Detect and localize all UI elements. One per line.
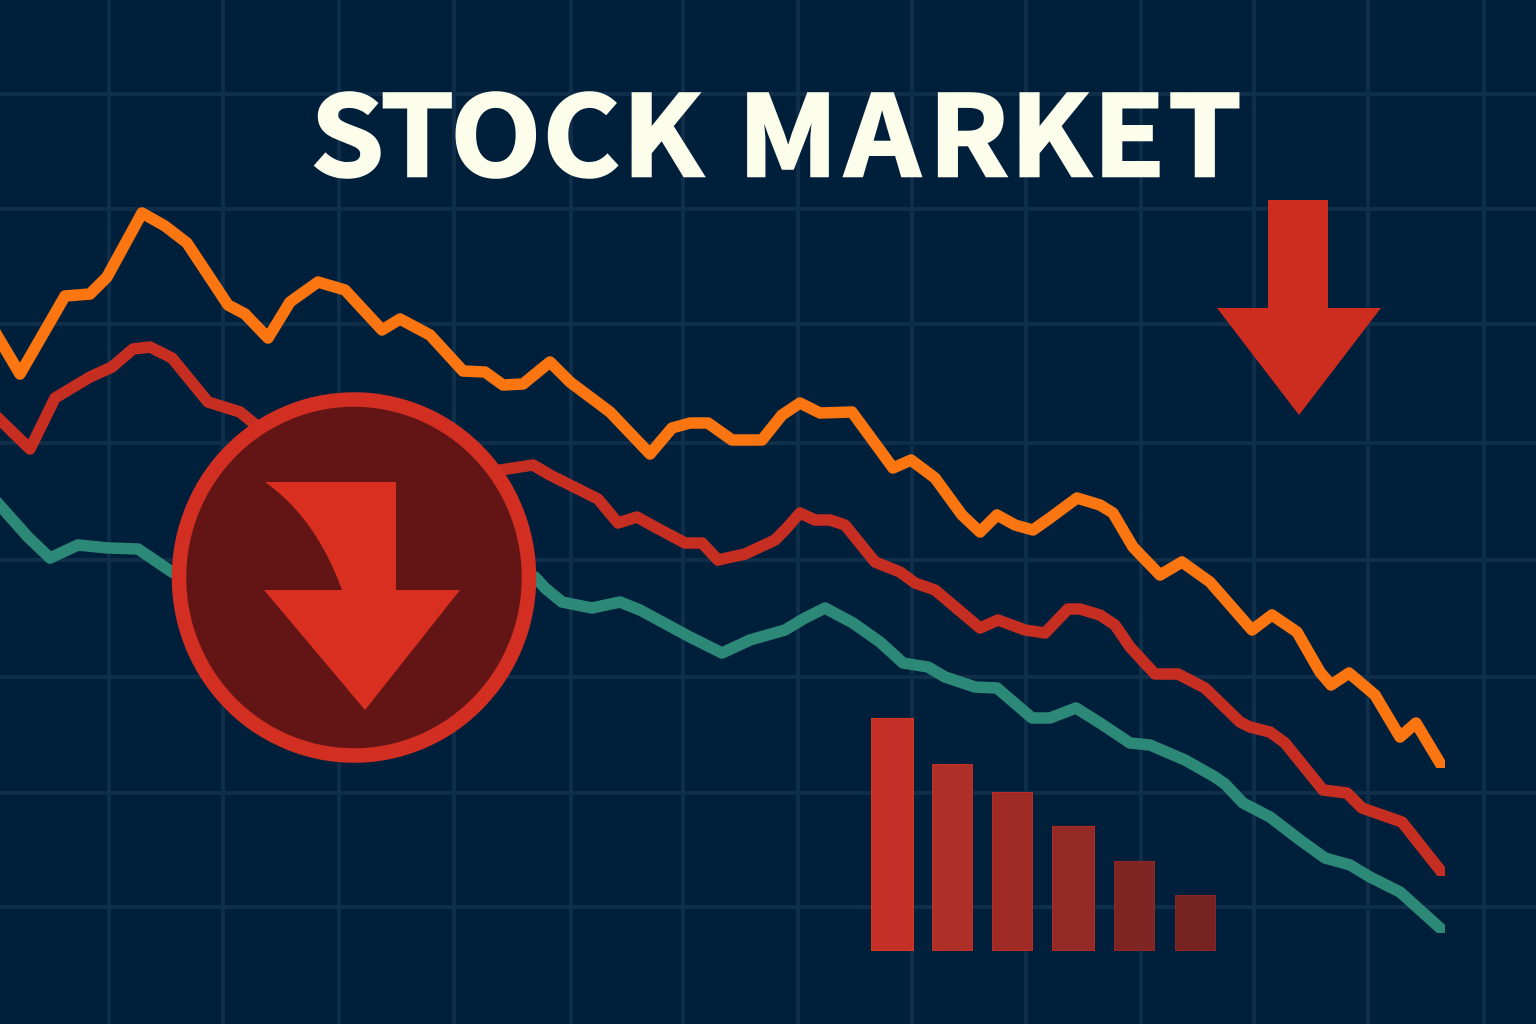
line: teal index: [0, 500, 1460, 946]
line: red index: [0, 347, 1460, 895]
title: STOCK MARKET: [311, 47, 1242, 208]
line: orange index: [0, 213, 1460, 795]
bar chart: [872, 718, 1216, 950]
icon: large down arrow: [1217, 200, 1381, 415]
icon: circle with down arrow: [179, 400, 529, 756]
